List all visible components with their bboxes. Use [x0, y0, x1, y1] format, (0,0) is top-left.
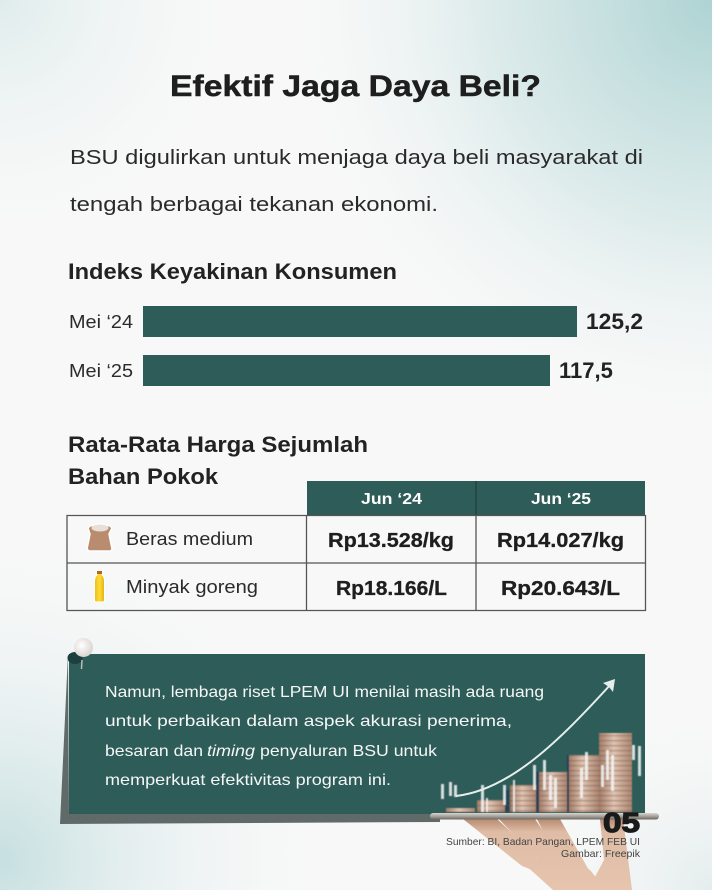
table header: Jun ‘24 [361, 491, 422, 508]
bar chart: consumer confidence index [69, 306, 643, 386]
title: Efektif Jaga Daya Beli? [170, 70, 541, 103]
candlesticks [441, 745, 641, 812]
source credits [446, 836, 641, 860]
callout text: besaran dan [105, 743, 203, 760]
intro text block [70, 147, 643, 216]
callout text: Namun, lembaga riset LPEM UI menilai masih ada ruang [105, 684, 544, 701]
heading: staple prices: Bahan Pokok [68, 464, 219, 489]
growth arrow [456, 679, 615, 796]
bar: Mei 25: Mei ‘25 [69, 361, 133, 381]
bar: Mei 24: Mei ‘24 [69, 312, 133, 332]
page number: 05 [603, 807, 640, 838]
row: beras medium [87, 524, 624, 552]
heading: consumer confidence: Indeks Keyakinan Konsumen [68, 259, 397, 284]
callout panel [60, 638, 645, 824]
row: beras medium: Rp14.027/kg [497, 530, 624, 552]
price table [67, 481, 646, 610]
panel shadow [60, 654, 440, 824]
heading: staple prices [68, 432, 368, 489]
callout text: timing [207, 743, 255, 760]
bar: Mei 24 [69, 306, 643, 337]
hand [463, 819, 632, 890]
illustration: hand holding coin stacks [430, 679, 659, 890]
source credits: Gambar: Freepik [561, 848, 641, 860]
panel body [69, 654, 645, 814]
callout text: penyaluran BSU untuk [260, 743, 438, 760]
coin stacks [446, 733, 632, 812]
icon: oil bottle [94, 571, 104, 602]
bar: Mei 25: 117,5 [559, 358, 613, 383]
row: minyak goreng [94, 571, 620, 602]
icon: pushpin [68, 638, 93, 669]
callout text: memperkuat efektivitas program ini. [105, 772, 391, 789]
row: minyak goreng: Rp18.166/L [336, 578, 447, 600]
source credits: Sumber: BI, Badan Pangan, LPEM FEB UI [446, 836, 640, 848]
intro text block: tengah berbagai tekanan ekonomi. [70, 194, 438, 216]
heading: staple prices: Rata-Rata Harga Sejumlah [68, 432, 368, 457]
bar: Mei 24: 125,2 [586, 309, 643, 334]
bar: Mei 25 [69, 355, 613, 386]
table header: Jun ‘25 [531, 491, 591, 508]
callout text: untuk perbaikan dalam aspek akurasi penerima, [105, 713, 512, 730]
intro text block: BSU digulirkan untuk menjaga daya beli masyarakat di [70, 147, 643, 169]
callout text [105, 684, 544, 789]
table header [307, 481, 645, 515]
row: beras medium: Rp13.528/kg [328, 530, 454, 552]
row: beras medium: Beras medium [126, 529, 253, 549]
icon: rice sack [87, 524, 112, 551]
row: minyak goreng: Minyak goreng [126, 577, 258, 597]
row: minyak goreng: Rp20.643/L [501, 578, 620, 600]
tablet [430, 813, 659, 820]
